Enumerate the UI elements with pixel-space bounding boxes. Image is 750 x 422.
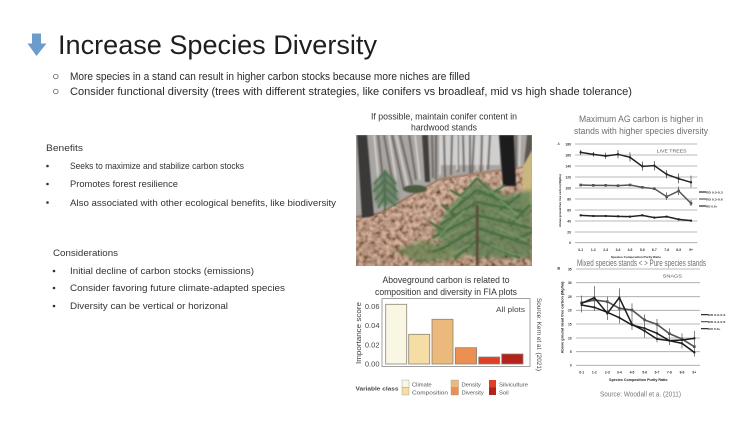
line chart B: snags: 0-1 xyxy=(579,370,584,374)
line chart B: snags: 35 xyxy=(568,267,572,271)
text block: benefits: Also associated with other ecological benefits, like biodiversity xyxy=(70,198,336,208)
line chart A: live trees: 1-2 xyxy=(591,248,596,252)
legend: Silviculture xyxy=(499,382,528,388)
icon: down arrow xyxy=(28,34,46,56)
title: Increase Species Diversity xyxy=(58,30,377,60)
line chart A: live trees: 40 xyxy=(567,219,571,223)
line chart A: live trees: 4-5 xyxy=(628,248,633,252)
line chart B: snags: 30 xyxy=(568,281,572,285)
line chart A: live trees: 60 xyxy=(567,208,571,212)
y axis ticks: 0.02 xyxy=(365,340,380,349)
line chart A: live trees: 80 xyxy=(567,197,571,201)
line chart A: live trees: 0-1 xyxy=(578,248,583,252)
line chart A: live trees xyxy=(557,142,723,259)
legend: Climate xyxy=(412,382,432,388)
line chart B: snags: RD 0.0-0.3 xyxy=(708,313,726,317)
line chart A: live trees: A xyxy=(557,142,560,146)
line chart B: snags: 20 xyxy=(568,309,572,313)
source: Woodall et al.: Source: Woodall et a. (2011) xyxy=(600,390,681,398)
line chart B: snags: Species Composition Purity Ratio xyxy=(609,378,667,382)
text block: benefits xyxy=(46,143,336,208)
line chart B: snags: 25 xyxy=(568,295,572,299)
y axis ticks xyxy=(365,302,380,368)
line chart B: snags: 6-7 xyxy=(655,370,660,374)
line chart B: snags: 9+ xyxy=(692,370,696,374)
text block: considerations: Initial decline of carbon stocks (emissions) xyxy=(70,266,254,276)
line chart B: snags: 10 xyxy=(568,336,572,340)
line chart A: live trees: RD 0.6+ xyxy=(706,204,718,208)
line chart B: snags: 2-3 xyxy=(605,370,610,374)
y axis ticks: 0.00 xyxy=(365,360,380,368)
line chart A: live trees: RD 0.3-0.6 xyxy=(706,197,723,201)
line chart A: live trees: 120 xyxy=(565,175,571,179)
line chart B: snags xyxy=(557,267,726,382)
line chart A: live trees: 160 xyxy=(565,153,571,157)
legend: Density xyxy=(462,382,481,388)
bar chart: importance score xyxy=(354,298,530,368)
line chart A: live trees: 9+ xyxy=(689,248,693,252)
line chart B: snags: 1-2 xyxy=(592,370,597,374)
legend: Variable class xyxy=(356,386,398,392)
leaf litter texture xyxy=(356,167,532,266)
line chart B: snags: 7-8 xyxy=(667,370,672,374)
line chart A: live trees: Species Composition Purity Ratio xyxy=(611,255,661,259)
line chart B: snags: B xyxy=(557,267,560,271)
line chart B: snags: Above ground dead tree carbon (Mg/ha) xyxy=(560,282,564,353)
conifer foliage mass xyxy=(373,170,532,264)
line chart A: live trees: 100 xyxy=(565,186,571,190)
line chart A: live trees: 20 xyxy=(567,230,571,234)
text block: benefits: Benefits xyxy=(46,143,83,153)
text block: considerations: Diversity can be vertical or horizonal xyxy=(70,301,228,311)
line chart A: live trees: 8-9 xyxy=(676,248,681,252)
line chart A: live trees: 180 xyxy=(565,142,571,146)
text block: considerations: Considerations xyxy=(53,248,118,258)
line chart B: snags: 15 xyxy=(568,322,572,326)
legend: Soil xyxy=(499,390,509,396)
line chart B: snags: 8-9 xyxy=(680,370,685,374)
line chart A: live trees: RD 0.0-0.3 xyxy=(706,190,723,194)
photo: conifer in hardwood forest xyxy=(356,135,532,266)
text block: considerations: Consider favoring future climate-adapted species xyxy=(70,283,285,293)
line chart B: snags: 0 xyxy=(570,364,572,368)
y axis ticks: 0.04 xyxy=(365,321,380,330)
line chart A: live trees: 140 xyxy=(565,164,571,168)
y axis title: Importance score xyxy=(354,302,363,364)
source: Kern et al.: Source: Kern et al. (2021) xyxy=(535,298,542,371)
main conifer branches xyxy=(430,178,532,258)
text block: considerations xyxy=(53,248,285,311)
text block: intro bullets xyxy=(54,71,632,98)
chart panel xyxy=(382,298,530,366)
legend: Diversity xyxy=(462,390,484,396)
line chart A: live trees: 2-3 xyxy=(603,248,608,252)
legend: Composition xyxy=(412,390,448,396)
line chart A: live trees: 5-6 xyxy=(640,248,645,252)
legend xyxy=(356,380,528,396)
chart A heading: Maximum AG carbon is higher in xyxy=(579,114,703,124)
photo caption: hardwood stands xyxy=(411,122,477,132)
text block: benefits: Promotes forest resilience xyxy=(70,179,178,189)
chart A heading: stands with higher species diversity xyxy=(574,126,708,136)
line chart B: snags: 5-6 xyxy=(642,370,647,374)
bar chart heading xyxy=(375,275,517,297)
text block: intro bullets: More species in a stand can result in higher carbon stocks because more niches are filled xyxy=(70,71,470,83)
line chart A: live trees: 0 xyxy=(569,241,571,245)
photo caption xyxy=(371,112,517,132)
text block: intro bullets: Consider functional diversity (trees with different strategies, like conifers vs broadleaf, mid vs high shade tolerance) xyxy=(70,86,632,98)
line chart A: live trees: Above ground live tree carbon (Mg/ha) xyxy=(558,174,562,227)
line chart B: snags: RD 0.6+ xyxy=(708,327,721,331)
line chart A: live trees: 3-4 xyxy=(616,248,621,252)
line chart B: snags: RD 0.3-0.6 xyxy=(708,320,726,324)
chart label: LIVE TREES xyxy=(657,149,687,155)
line chart B: snags: 4-5 xyxy=(630,370,635,374)
bars xyxy=(386,304,523,364)
line chart B: snags: 5 xyxy=(570,350,572,354)
line chart A: live trees: 7-8 xyxy=(664,248,669,252)
bar chart heading: composition and diversity in FIA plots xyxy=(375,287,517,297)
y axis ticks: 0.06 xyxy=(365,302,380,311)
panel label: All plots xyxy=(496,305,525,314)
chart A heading xyxy=(574,114,708,136)
photo caption: If possible, maintain conifer content in xyxy=(371,112,517,122)
bar chart heading: Aboveground carbon is related to xyxy=(382,275,510,285)
line chart A: live trees: 6-7 xyxy=(652,248,657,252)
small conifer xyxy=(373,170,398,212)
line chart B: snags: 3-4 xyxy=(617,370,622,374)
chart label: SNAGS xyxy=(663,273,683,279)
text block: benefits: Seeks to maximize and stabilize carbon stocks xyxy=(70,161,244,171)
